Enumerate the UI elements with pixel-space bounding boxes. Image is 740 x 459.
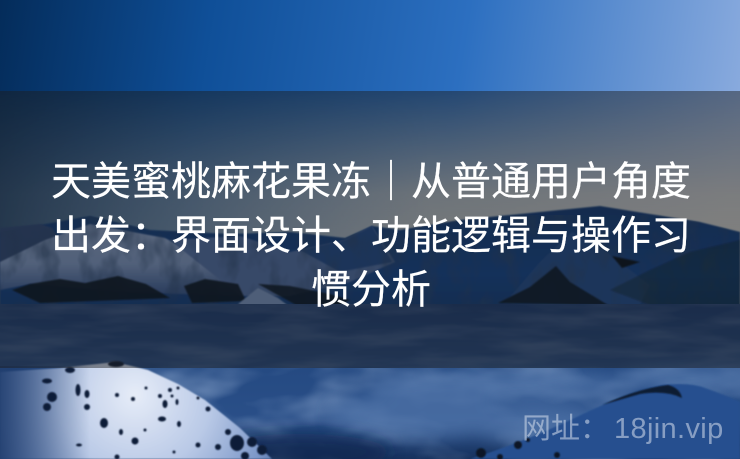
watermark URL: 网址：18jin.vip	[522, 413, 724, 445]
title: 天美蜜桃麻花果冻｜从普通用户角度	[51, 160, 691, 204]
far mountain range	[0, 205, 740, 304]
title: 惯分析	[311, 268, 431, 312]
snowy foreground hill with trees	[0, 361, 272, 459]
right snowy ridge	[470, 384, 740, 459]
sea of clouds	[0, 304, 740, 459]
dark rock ridges	[12, 240, 740, 310]
sky	[0, 0, 740, 320]
snow slab at ridge base	[238, 288, 298, 316]
title	[51, 160, 691, 312]
title: 出发：界面设计、功能逻辑与操作习	[51, 214, 691, 258]
translucent dark band	[0, 91, 740, 368]
